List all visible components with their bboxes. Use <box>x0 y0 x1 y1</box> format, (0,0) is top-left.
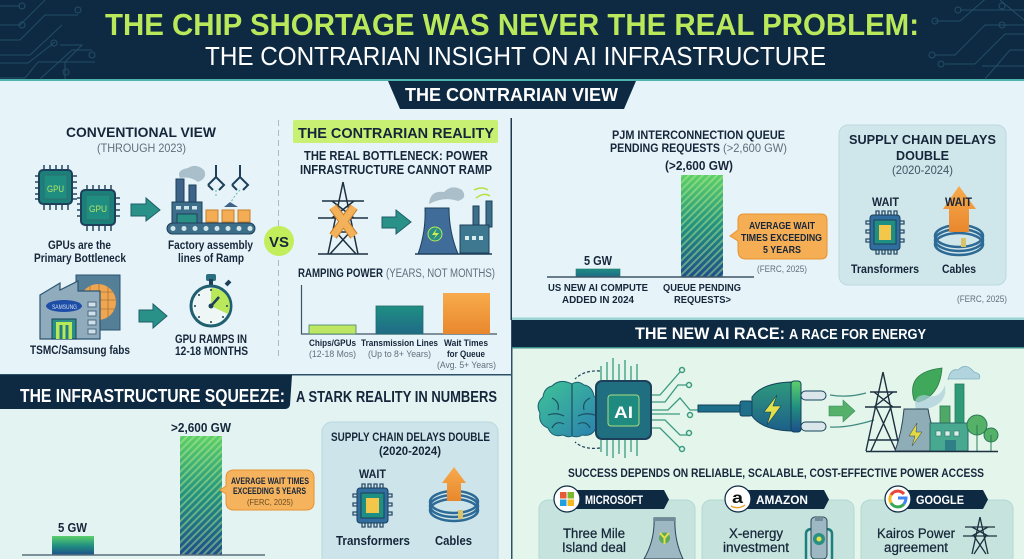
icon: transformer <box>866 211 904 254</box>
badge: VS: VS <box>269 234 289 251</box>
ribbon: Amazon <box>740 490 829 509</box>
label: US new AI compute <box>548 282 648 306</box>
text: Three Mile Island deal: Three Mile <box>563 526 625 541</box>
label: wait (cables): WAIT <box>945 195 973 209</box>
panel: new AI race background <box>512 320 1024 559</box>
heading: supply chain <box>331 432 490 458</box>
heading: ramping power <box>298 268 495 280</box>
bar: wait times for queue <box>443 293 490 334</box>
band: infrastructure squeeze <box>0 374 512 409</box>
icon: brain <box>538 381 600 437</box>
label: queue pending requests <box>663 282 741 306</box>
band: new AI race: THE NEW AI RACE: <box>635 324 785 343</box>
label: US new AI compute: US NEW AI COMPUTE <box>548 282 648 294</box>
panel: supply chain delays double (top) <box>839 125 1006 285</box>
heading: supply chain delays double: (2020-2024) <box>892 163 953 177</box>
callout: average wait times: TIMES EXCEEDING <box>741 233 822 244</box>
text: Three Mile Island deal: Island deal <box>562 540 626 555</box>
heading: PJM interconnection queue <box>610 128 787 155</box>
text: X-energy investment <box>723 526 789 555</box>
card: Google <box>861 486 1013 559</box>
heading: ramping power: RAMPING POWER <box>298 268 384 280</box>
card: Amazon <box>702 486 854 559</box>
text: Kairos Power agreement <box>877 526 955 555</box>
bar: queue requests <box>180 436 222 555</box>
left border of AI race section <box>511 320 512 559</box>
text: X-energy investment: X-energy <box>729 526 783 541</box>
icon: AI chip <box>596 381 651 439</box>
arrow: GPUs to factory <box>131 198 160 221</box>
icon: transformer <box>353 484 392 527</box>
label: wait: WAIT <box>359 467 387 481</box>
icon: power cord and plug <box>698 381 826 432</box>
bar chart: ramping power <box>302 285 497 371</box>
band: infrastructure squeeze: A STARK REALITY IN NUMBERS <box>296 389 497 406</box>
heading: supply chain delays double <box>849 132 996 177</box>
arrow: tower to plant <box>382 210 411 234</box>
text: X-energy investment: investment <box>723 540 789 555</box>
label: factory assembly lines of ramp: lines of Ramp <box>178 253 244 265</box>
icon: power plant <box>415 187 492 254</box>
text: Three Mile Island deal <box>562 526 626 555</box>
source: FERC 2025: (FERC, 2025) <box>757 264 807 274</box>
header circuit pattern left <box>0 0 95 79</box>
subtitle: THE CONTRARIAN INSIGHT ON AI INFRASTRUCTURE <box>205 41 826 71</box>
arrows: cycle between brain and chip <box>575 371 600 448</box>
value: 2,600 GW: (>2,600 GW) <box>665 159 733 173</box>
heading: PJM interconnection queue: (>2,600 GW) <box>723 141 787 155</box>
icon: Microsoft logo <box>554 486 580 512</box>
bar: new AI compute <box>52 536 94 555</box>
text: the real bottleneck: THE REAL BOTTLENECK: POWER <box>304 149 488 163</box>
band: new AI race: A RACE FOR ENERGY <box>789 327 926 343</box>
label: transformers: Transformers <box>336 533 410 548</box>
heading: supply chain delays double: DOUBLE <box>896 148 949 163</box>
panel: contrarian reality <box>293 120 498 371</box>
label: GPUs are the primary bottleneck: Primary Bottleneck <box>34 253 127 265</box>
ribbon: Google <box>900 490 988 509</box>
icon: transmission tower <box>865 372 901 451</box>
panel: infrastructure squeeze background <box>0 375 512 559</box>
panel: conventional view <box>30 124 255 358</box>
bar: queue pending requests <box>681 175 723 277</box>
callout: wait times: (FERC, 2025) <box>247 497 293 507</box>
label: GPUs are the primary bottleneck <box>34 240 127 265</box>
label: GPU ramps in 12-18 months: 12-18 MONTHS <box>175 346 248 358</box>
panel: supply chain delays double (bottom) <box>322 422 498 559</box>
label: US new AI compute: ADDED IN 2024 <box>562 294 634 306</box>
header band <box>0 0 1024 81</box>
text: Kairos Power agreement: Kairos Power <box>877 526 955 541</box>
icon: TSMC Samsung fab: SAMSUNG <box>52 305 77 311</box>
icon: cables with up arrow <box>430 467 478 521</box>
value: 5 GW: 5 GW <box>584 254 612 268</box>
source: FERC 2025 (panel): (FERC, 2025) <box>957 294 1007 304</box>
bar: transmission lines <box>376 306 423 334</box>
banner: the contrarian view: THE CONTRARIAN VIEW <box>405 84 619 105</box>
ribbon: Microsoft: MICROSOFT <box>585 493 644 507</box>
label: factory assembly lines of ramp: Factory assembly <box>168 240 254 252</box>
ribbon: Microsoft <box>570 490 669 509</box>
icon: chip pins and traces <box>601 358 700 458</box>
callout: wait times: AVERAGE WAIT TIMES <box>231 476 309 486</box>
label: transmission lines: (Up to 8+ Years) <box>368 349 431 360</box>
label: chips and GPUs: (12-18 Mos) <box>309 349 356 360</box>
label: GPUs are the primary bottleneck: GPUs are the <box>48 240 111 252</box>
subheading: through 2023: (THROUGH 2023) <box>97 141 186 155</box>
label: factory assembly lines of ramp <box>168 240 254 265</box>
band: infrastructure squeeze: THE INFRASTRUCTURE SQUEEZE: <box>20 385 285 406</box>
label: GPU ramps in 12-18 months: GPU RAMPS IN <box>175 334 247 346</box>
icon: cables with up arrow <box>935 186 983 255</box>
icon: factory assembly line <box>167 165 255 234</box>
icon: AI chip: AI <box>614 403 633 422</box>
panel: PJM queue chart <box>547 128 827 306</box>
icon: clean energy plant <box>866 366 998 452</box>
chart axis <box>22 554 265 556</box>
label: wait times for queue: Wait Times <box>444 338 488 349</box>
value: 2,600 GW: >2,600 GW <box>171 420 232 435</box>
label: transformers: Transformers <box>851 262 919 276</box>
icon: TSMC Samsung fab <box>40 275 120 339</box>
title: THE CHIP SHORTAGE WAS NEVER THE REAL PROBLEM: <box>105 7 919 42</box>
icon: GPU chips: GPU <box>47 184 64 194</box>
icon: Google logo <box>885 486 911 512</box>
label: queue pending requests: REQUESTS> <box>674 294 731 306</box>
icon: transmission tower <box>963 517 997 554</box>
icon: Amazon logo: a <box>732 490 743 507</box>
icon: Amazon logo <box>725 486 751 512</box>
label: cables: Cables <box>435 533 472 548</box>
callout: wait times: EXCEEDING 5 YEARS <box>233 486 306 496</box>
label: queue pending requests: QUEUE PENDING <box>663 282 741 294</box>
heading: the contrarian reality: THE CONTRARIAN REALITY <box>298 125 494 142</box>
label: TSMC Samsung fabs: TSMC/Samsung fabs <box>30 345 130 357</box>
label: chips and GPUs <box>309 338 356 360</box>
heading: supply chain: (2020-2024) <box>379 446 441 458</box>
text: the real bottleneck: INFRASTRUCTURE CANNOT RAMP <box>300 163 492 177</box>
label: transmission lines: Transmission Lines <box>361 338 438 349</box>
label: chips and GPUs: Chips/GPUs <box>309 338 356 349</box>
label: cables: Cables <box>942 262 976 276</box>
heading: supply chain: SUPPLY CHAIN DELAYS DOUBLE <box>331 432 490 444</box>
banner: the contrarian view <box>388 81 636 109</box>
arrow: plug to grid <box>829 393 874 427</box>
band: new AI race <box>512 318 1024 348</box>
heading: PJM interconnection queue: PENDING REQUESTS <box>610 141 720 155</box>
icon: GPU chips <box>35 165 120 231</box>
callout: average wait times: AVERAGE WAIT <box>749 221 815 232</box>
chart axis <box>547 276 754 278</box>
callout: average wait times <box>730 214 827 259</box>
heading: PJM interconnection queue: PJM INTERCONNECTION QUEUE <box>612 128 785 142</box>
callout: wait times <box>220 470 314 510</box>
label: wait (transformers): WAIT <box>872 195 900 209</box>
label: GPU ramps in 12-18 months <box>175 334 248 358</box>
bar: US new AI compute <box>576 269 620 277</box>
icon: reactor tank <box>806 517 832 559</box>
text: the real bottleneck <box>300 149 492 177</box>
heading: conventional view: CONVENTIONAL VIEW <box>66 124 217 140</box>
label: transmission lines <box>361 338 438 360</box>
ribbon: Amazon: AMAZON <box>756 493 808 507</box>
arrow: fabs to GPU ramp <box>139 304 167 328</box>
illustration: AI chip plugged into power <box>538 358 998 458</box>
panel: infrastructure squeeze chart <box>22 420 314 555</box>
ribbon: Google: GOOGLE <box>916 493 964 507</box>
card: Microsoft <box>539 486 695 559</box>
value: 5 GW: 5 GW <box>58 520 88 535</box>
divider: top left and right panels <box>510 118 512 320</box>
bar: chips and GPUs <box>309 325 356 334</box>
badge: VS <box>264 226 294 256</box>
icon: transmission tower crossed <box>318 182 368 254</box>
icon: circuit nodes <box>680 368 692 452</box>
header circuit pattern right <box>929 0 1024 79</box>
heading: ramping power: (YEARS, NOT MONTHS) <box>386 268 495 280</box>
label: wait times for queue: for Queue <box>447 349 485 360</box>
label: wait times for queue: (Avg. 5+ Years) <box>437 360 496 371</box>
icon: cooling tower <box>644 518 683 559</box>
callout: average wait times: 5 YEARS <box>763 245 801 256</box>
text: Kairos Power agreement: agreement <box>884 540 948 555</box>
divider: conventional versus contrarian <box>278 120 280 357</box>
icon: stopwatch <box>191 274 231 326</box>
heading: supply chain delays double: SUPPLY CHAIN DELAYS <box>849 132 996 147</box>
label: wait times for queue <box>437 338 496 371</box>
icon: GPU chips: GPU <box>89 204 107 214</box>
